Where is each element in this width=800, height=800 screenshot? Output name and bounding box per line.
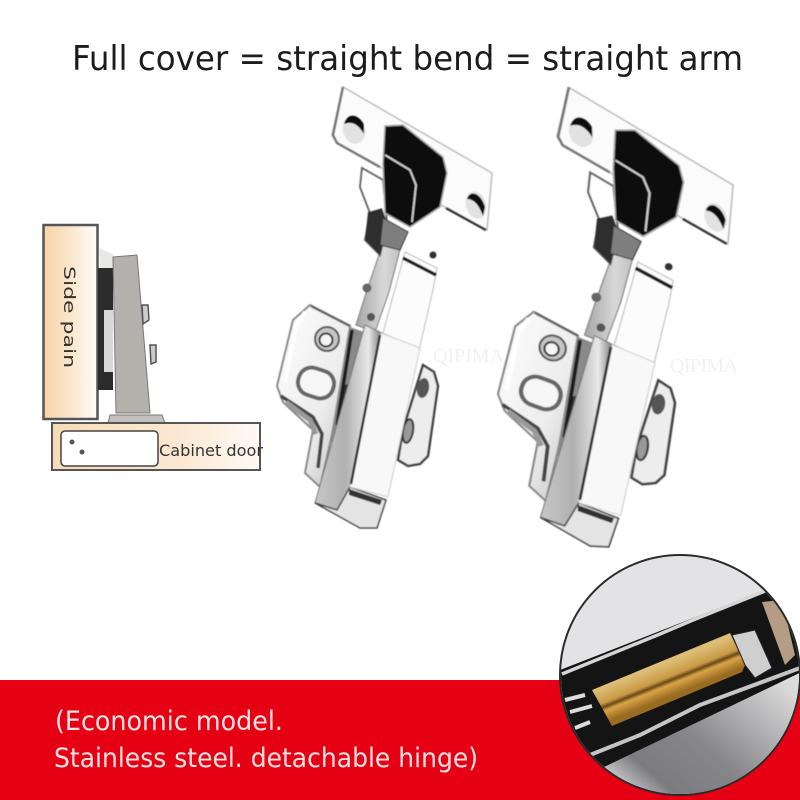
lower steel surface [602, 668, 800, 800]
lens content [555, 588, 800, 800]
left teeth [565, 695, 592, 728]
hinge photo left [277, 87, 492, 528]
dark channel [555, 588, 800, 768]
lower rail [590, 668, 800, 755]
hinge base [108, 415, 165, 423]
panel: hinge installation diagram [44, 225, 263, 470]
cabinet door board [52, 423, 260, 470]
damper bracket [732, 630, 772, 678]
right fitting [762, 600, 795, 665]
red banner [0, 680, 800, 800]
brass cylinder [592, 633, 745, 726]
upper rail [562, 591, 765, 674]
adjustment screw lower [150, 345, 156, 364]
title: Full cover = straight bend = straight arm [72, 39, 743, 79]
hinge side profile [113, 255, 150, 413]
side panel board [44, 225, 98, 419]
door screw 1 [70, 440, 74, 444]
cabinet door label: Cabinet door [159, 441, 263, 460]
door screw 2 [80, 450, 84, 454]
mounting detail [104, 310, 113, 372]
callout: brass damper closeup [555, 555, 800, 800]
banner text [54, 706, 478, 774]
hinge pivot highlight [99, 248, 113, 268]
hinge photo right [496, 84, 735, 553]
adjustment screw upper [142, 305, 149, 324]
side panel label: Side pain [60, 266, 79, 368]
watermark right: QIPIMA [670, 355, 739, 377]
hinge cup recess [61, 431, 158, 466]
mounting strip [98, 268, 113, 390]
banner line 2: Stainless steel. detachable hinge) [54, 743, 478, 774]
banner line 1: (Economic model. [55, 706, 283, 737]
lens backdrop [560, 555, 800, 795]
watermark left: QIPIMA [433, 345, 505, 367]
